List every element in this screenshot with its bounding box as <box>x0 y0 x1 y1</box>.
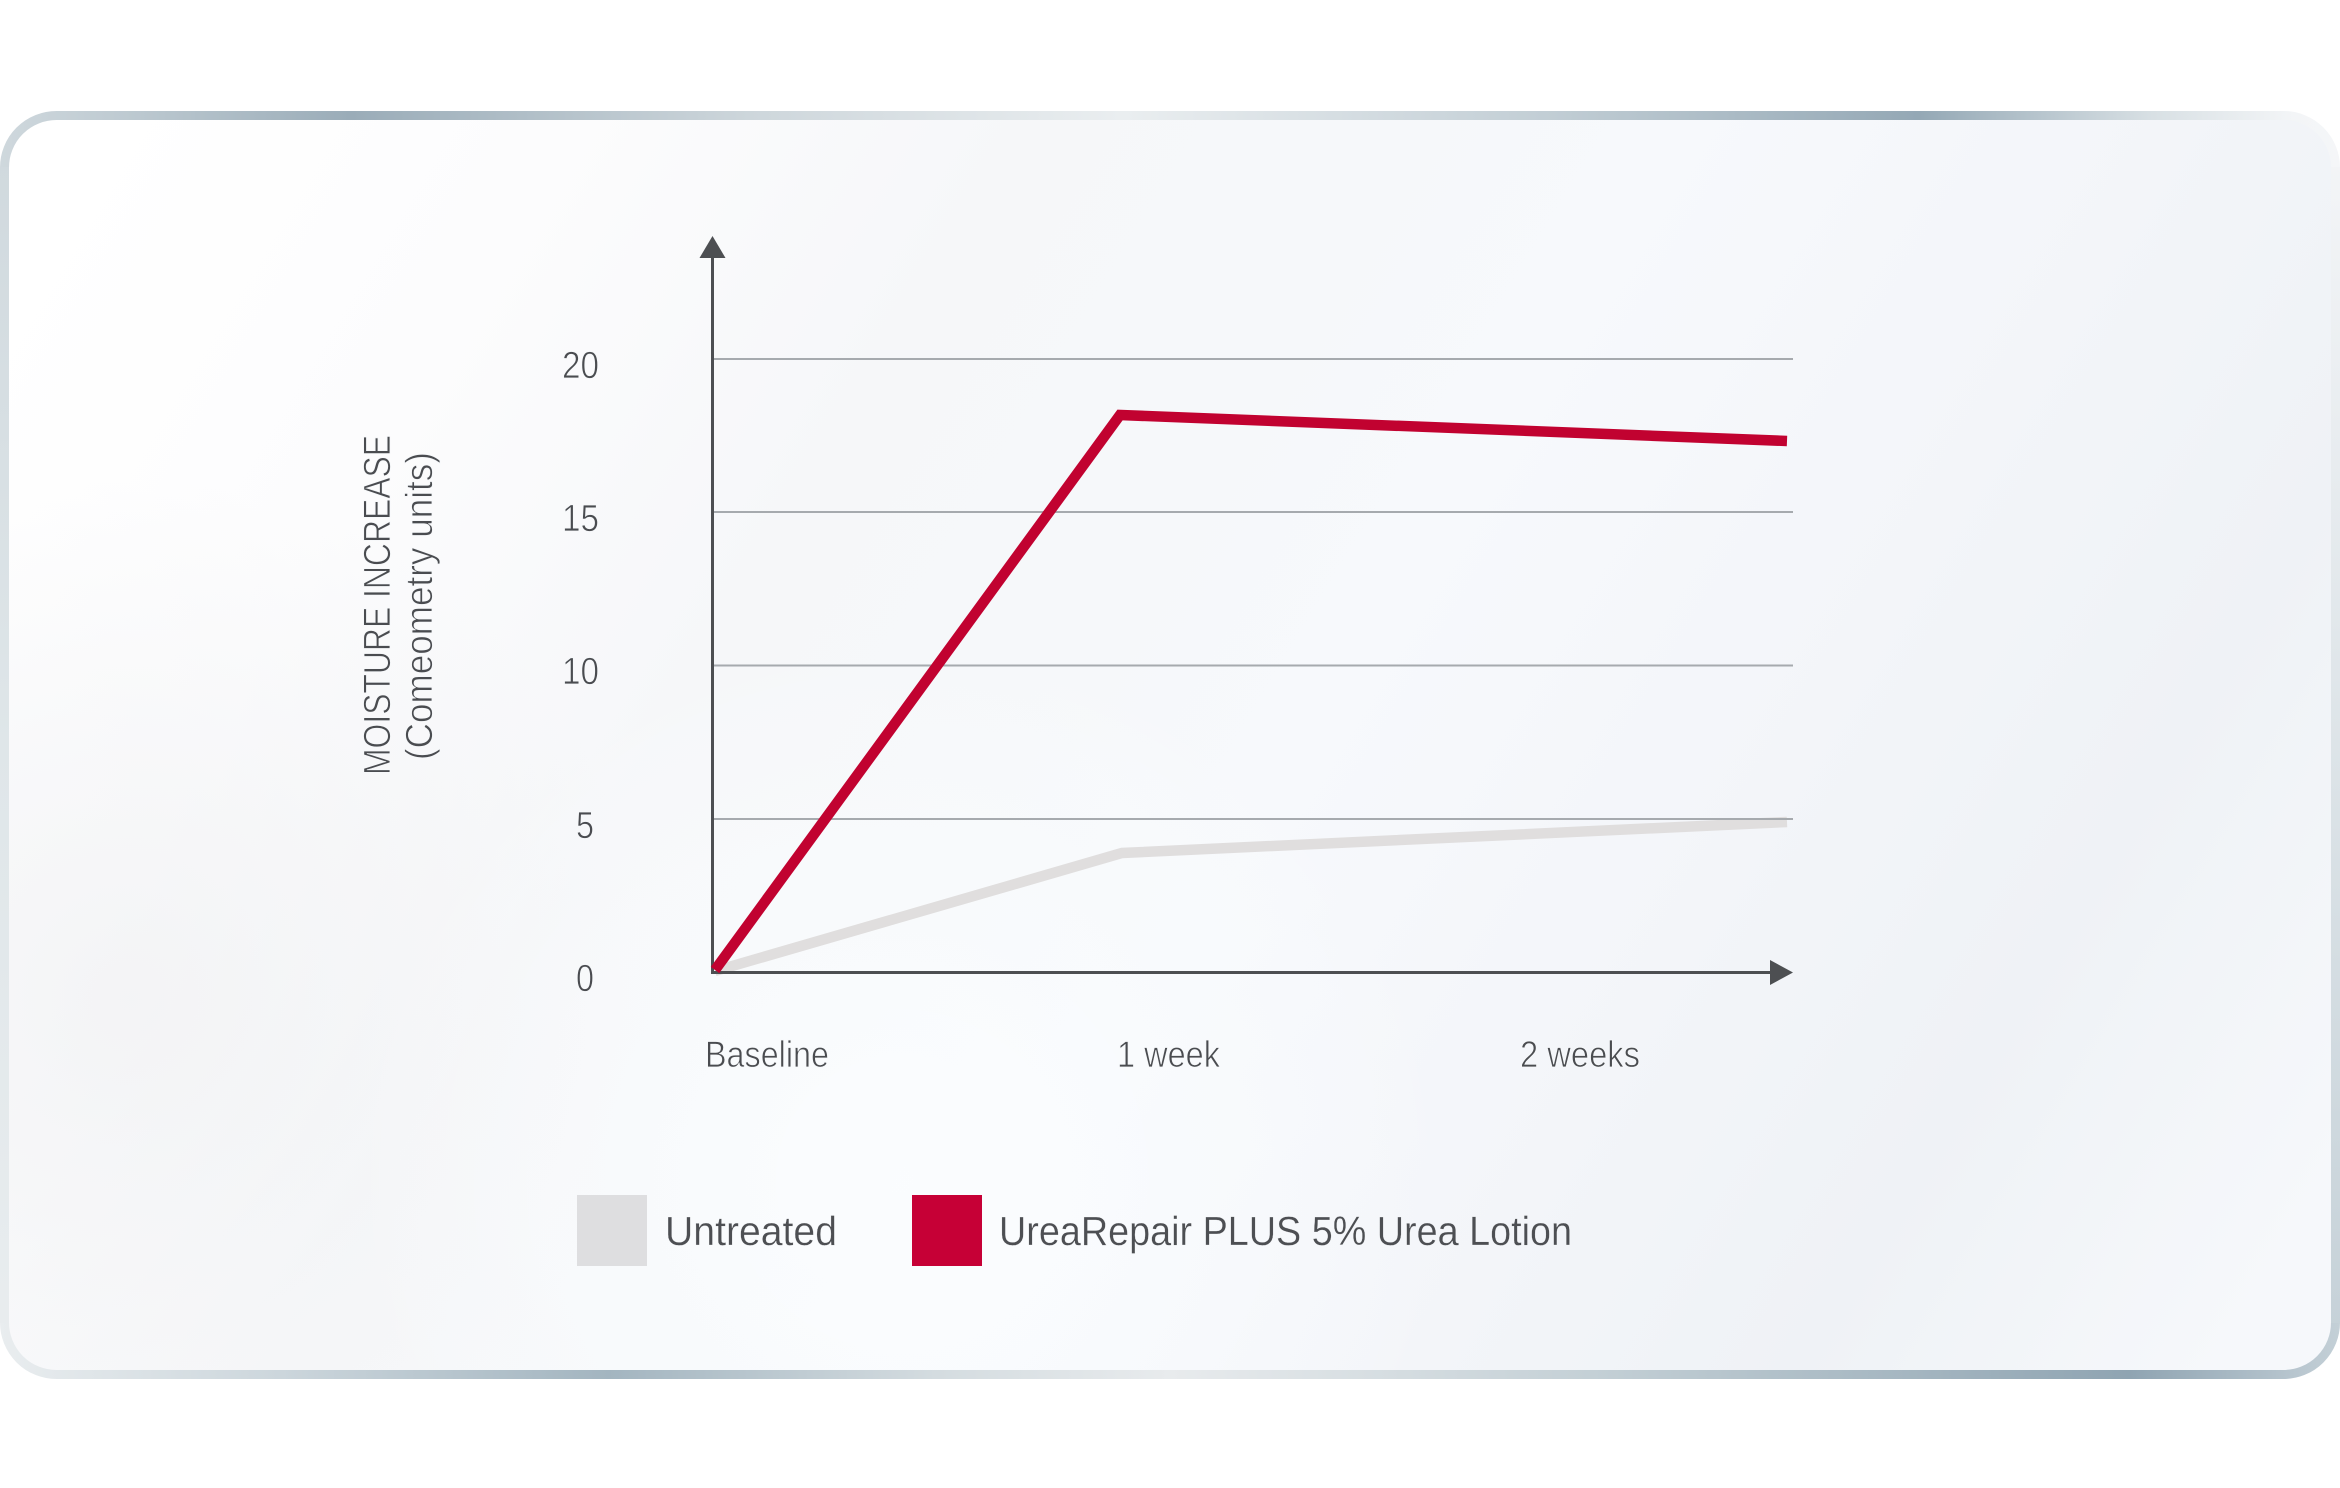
x axis labels: 2 weeks <box>1520 1034 1640 1075</box>
x axis labels: 1 week <box>1117 1034 1220 1075</box>
y axis tick labels: 20 <box>562 345 599 387</box>
y axis tick labels <box>562 345 599 1000</box>
y axis title <box>357 435 441 775</box>
y axis tick labels: 0 <box>576 958 594 1000</box>
legend: Untreated: Untreated <box>665 1208 837 1254</box>
legend: UreaRepair PLUS 5% Urea Lotion <box>912 1195 1572 1266</box>
line chart <box>700 236 1793 985</box>
legend <box>577 1195 1572 1266</box>
x axis labels: Baseline <box>705 1034 829 1075</box>
x axis with arrow <box>711 960 1793 985</box>
y axis title: (Comeometry units) <box>399 452 441 760</box>
data line: Untreated <box>715 822 1787 971</box>
y axis tick labels: 15 <box>562 498 599 540</box>
x axis labels <box>705 1034 1640 1075</box>
gridlines <box>713 359 1793 819</box>
data line: UreaRepair PLUS 5% Urea Lotion <box>715 415 1787 970</box>
legend: UreaRepair PLUS 5% Urea Lotion: UreaRepair PLUS 5% Urea Lotion <box>999 1208 1572 1254</box>
y axis tick labels: 5 <box>576 805 594 847</box>
y axis title: MOISTURE INCREASE <box>357 435 399 775</box>
legend: Untreated <box>577 1195 837 1266</box>
y axis tick labels: 10 <box>562 651 599 693</box>
y axis with arrow <box>700 236 726 973</box>
